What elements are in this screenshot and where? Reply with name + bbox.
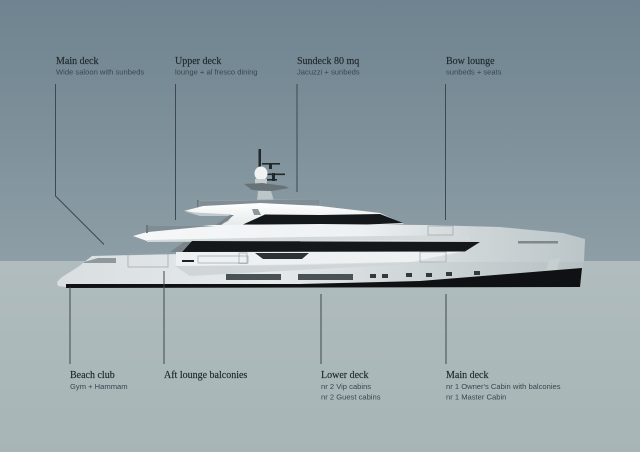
label: wide saloon: Wide saloon with sunbeds	[56, 68, 144, 76]
upper deck	[184, 203, 404, 227]
aft rail	[146, 225, 216, 233]
leader line	[296, 84, 298, 192]
label: lounge: lounge + al fresco dining	[175, 68, 258, 76]
label: sundeck: Sundeck 80 mq	[297, 56, 359, 67]
annotation: aft lounge balconies	[164, 271, 247, 381]
leader line	[56, 84, 104, 244]
label: master cabin: nr 1 Master Cabin	[446, 392, 506, 402]
label: guest cabins: nr 2 Guest cabins	[321, 392, 381, 402]
label: sunbeds seats: sunbeds + seats	[446, 68, 502, 76]
hull side shadow	[175, 262, 455, 276]
label: jacuzzi: Jacuzzi + sunbeds	[297, 68, 360, 76]
sundeck railing	[197, 199, 320, 208]
mid deck roof	[133, 224, 585, 262]
upper deck shadow	[186, 212, 232, 216]
leader line	[444, 84, 446, 220]
annotation: upper deck	[175, 56, 258, 220]
annotation: sundeck	[297, 56, 360, 192]
main hull	[57, 240, 585, 287]
leader line	[445, 294, 447, 364]
small vent	[182, 260, 194, 262]
annotation: main deck	[56, 56, 144, 244]
aft deck detail	[84, 258, 116, 263]
label: lower deck: Lower deck	[321, 370, 368, 381]
vent on upper deck	[252, 209, 261, 215]
aft stair	[170, 242, 191, 252]
anchor recess	[546, 258, 560, 271]
annotation: beach club	[70, 287, 128, 391]
annotation: main deck cabins	[446, 294, 561, 402]
label: gym: Gym + Hammam	[70, 382, 128, 391]
label: bow lounge: Bow lounge	[446, 56, 495, 67]
leader line	[163, 271, 165, 364]
roof underside shade	[147, 235, 470, 242]
label: aft lounge: Aft lounge balconies	[164, 370, 247, 381]
annotation: bow lounge	[446, 56, 502, 220]
label: main deck: Main deck	[56, 56, 98, 67]
label: vip cabins: nr 2 Vip cabins	[321, 382, 371, 391]
superstructure side	[176, 251, 465, 266]
annotation: lower deck	[321, 294, 381, 402]
mid window band	[255, 253, 309, 259]
label: owner's cabin: nr 1 Owner's Cabin with balconies	[446, 382, 561, 391]
upper deck stair	[214, 215, 234, 226]
leader line	[320, 294, 322, 364]
label: main deck: Main deck	[446, 370, 488, 381]
label: beach club: Beach club	[70, 370, 115, 381]
mast and radar	[244, 149, 289, 201]
yacht	[57, 149, 585, 288]
upper windows	[243, 214, 403, 226]
long portholes	[226, 274, 353, 280]
portholes	[370, 271, 480, 278]
boot stripe	[66, 268, 582, 288]
hull panels	[128, 226, 453, 267]
background: sky	[0, 0, 640, 262]
window band	[182, 241, 480, 252]
label: upper deck: Upper deck	[175, 56, 221, 67]
leader line	[174, 84, 176, 220]
leader line	[69, 287, 71, 364]
bow detail	[518, 241, 558, 244]
background: sea	[0, 261, 640, 452]
